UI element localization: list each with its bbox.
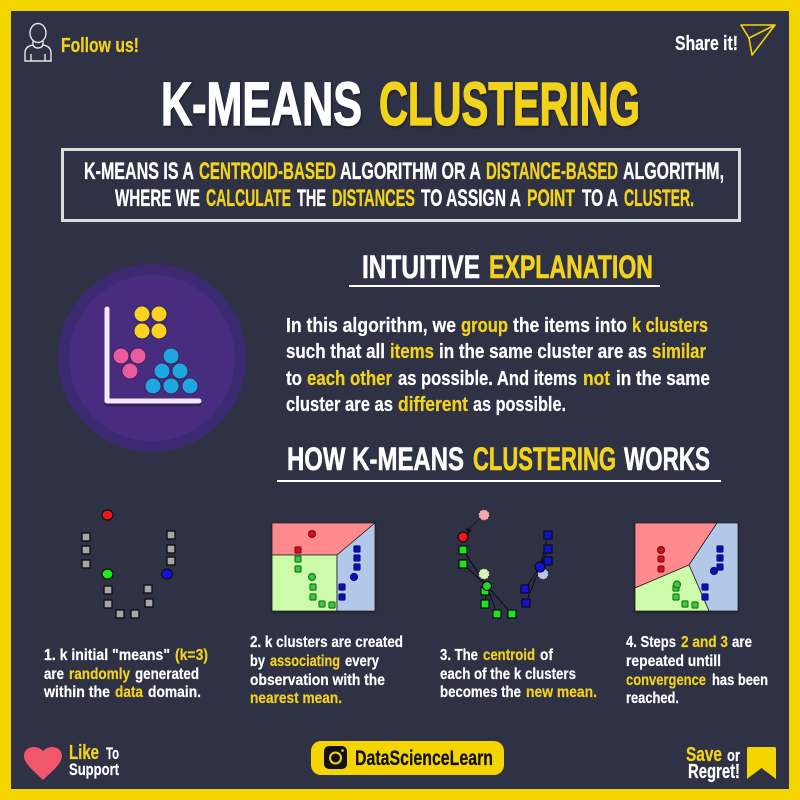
support label: Support xyxy=(69,760,119,779)
like to support xyxy=(24,742,119,780)
step 2 caption xyxy=(250,634,403,707)
definition line 2: POINT xyxy=(527,185,575,212)
definition line 2 xyxy=(115,185,694,212)
step 1 caption xyxy=(43,647,208,701)
step 4 diagram: converged regions xyxy=(635,523,738,611)
step 3 caption xyxy=(440,647,597,701)
icon: heart xyxy=(24,747,62,780)
blue points xyxy=(702,546,723,600)
icon: person xyxy=(25,24,51,61)
explanation paragraph: such that all xyxy=(286,341,385,363)
explanation paragraph: in the same cluster are as xyxy=(439,341,647,363)
step 2 caption: observation with the xyxy=(250,672,385,689)
definition line 1: CENTROID-BASED xyxy=(199,158,336,185)
save or regret xyxy=(686,744,776,783)
new means xyxy=(458,532,545,590)
step 4 caption: reached. xyxy=(626,690,679,707)
yellow cluster xyxy=(134,306,167,339)
regret label: Regret! xyxy=(688,761,740,783)
definition line 2: THE xyxy=(297,185,326,212)
step 1 caption: randomly xyxy=(69,666,130,683)
definition line 2: TO ASSIGN A xyxy=(421,185,521,212)
heading: how k-means clustering works: HOW K-MEANS xyxy=(287,441,464,477)
step 4 caption: repeated untill xyxy=(626,653,721,670)
step 3 caption: centroid xyxy=(483,647,535,664)
explanation paragraph: different xyxy=(398,394,468,416)
blue cluster xyxy=(145,348,198,394)
definition line 2: DISTANCES xyxy=(332,185,415,212)
heading: intuitive explanation: INTUITIVE xyxy=(362,249,480,285)
icon: cluster scatter badge xyxy=(58,264,246,452)
definition line 1: ALGORITHM OR A xyxy=(340,158,481,185)
to label: To xyxy=(106,744,119,763)
green points xyxy=(459,546,516,618)
step 1 caption: generated xyxy=(135,666,199,683)
explanation paragraph: In this algorithm, we xyxy=(286,315,456,337)
red points xyxy=(295,530,316,553)
step 4 caption: convergence xyxy=(626,672,706,689)
green points xyxy=(673,581,698,608)
heading: intuitive explanation: EXPLANATION xyxy=(489,249,653,285)
step 2 diagram: voronoi assignment xyxy=(272,523,375,611)
title: CLUSTERING xyxy=(379,70,640,138)
cluster regions xyxy=(635,523,738,611)
step 2 caption: every xyxy=(345,653,379,670)
step 1 caption: (k=3) xyxy=(175,647,208,664)
step 1 caption: within the xyxy=(43,684,110,701)
step 2 caption: nearest mean. xyxy=(250,690,342,707)
step 4 caption xyxy=(626,634,768,707)
follow us label: Follow us! xyxy=(61,35,139,57)
explanation paragraph: in the same xyxy=(616,368,710,390)
icon: paper plane xyxy=(741,25,775,55)
definition line 2: WHERE WE xyxy=(115,185,200,212)
follow us xyxy=(25,24,139,61)
heading: how k-means clustering works: WORKS xyxy=(624,441,710,477)
explanation paragraph: not xyxy=(583,368,610,390)
heading: intuitive explanation xyxy=(349,249,660,287)
step 4 caption: 2 and 3 xyxy=(681,634,728,651)
step 1 caption: domain. xyxy=(148,684,201,701)
icon: instagram xyxy=(324,746,347,769)
like label: Like xyxy=(69,742,99,764)
step 1 caption: are xyxy=(44,666,64,683)
explanation paragraph: k clusters xyxy=(632,315,708,337)
title: K-MEANS xyxy=(161,70,362,138)
cluster regions xyxy=(272,523,375,611)
explanation paragraph: the items into xyxy=(513,315,627,337)
instagram handle button xyxy=(311,741,504,775)
step 1 diagram: initial means xyxy=(82,510,175,618)
step 2 caption: associating xyxy=(270,653,340,670)
red points xyxy=(658,546,664,572)
explanation paragraph: items xyxy=(390,341,434,363)
icon: bookmark xyxy=(747,747,776,779)
definition line 1: DISTANCE-BASED xyxy=(486,158,618,185)
explanation paragraph: cluster are as xyxy=(286,394,393,416)
definition line 1: ALGORITHM, xyxy=(623,158,724,185)
step 3 caption: 3. The xyxy=(440,647,478,664)
blue points xyxy=(521,531,552,607)
definition line 2: TO A xyxy=(582,185,618,212)
explanation paragraph: as possible. xyxy=(473,394,566,416)
blue points xyxy=(339,546,360,600)
title xyxy=(161,70,640,138)
share it label: Share it! xyxy=(675,33,738,55)
definition line 1 xyxy=(84,158,724,185)
unassigned points xyxy=(82,531,175,618)
movement arrow xyxy=(466,528,472,534)
definition line 2: CLUSTER. xyxy=(624,185,694,212)
definition line 2: CALCULATE xyxy=(206,185,291,212)
step 3 caption: new mean. xyxy=(526,684,597,701)
explanation paragraph: to xyxy=(286,368,302,390)
step 3 caption: of xyxy=(540,647,554,664)
share it xyxy=(675,25,775,55)
definition line 1: K-MEANS IS A xyxy=(84,158,194,185)
random means xyxy=(102,510,172,579)
step 4 caption: 4. Steps xyxy=(626,634,676,651)
step 4 caption: are xyxy=(732,634,752,651)
or label: or xyxy=(727,746,740,765)
step 4 caption: has been xyxy=(712,672,768,689)
chart axes xyxy=(107,309,199,404)
definition box xyxy=(62,150,740,220)
step 3 caption: each of the k clusters xyxy=(440,666,576,683)
green points xyxy=(295,556,335,608)
heading: how k-means clustering works xyxy=(277,441,721,482)
explanation paragraph xyxy=(286,315,710,416)
step 1 caption: data xyxy=(115,684,143,701)
explanation paragraph: as possible. And items xyxy=(398,368,577,390)
handle text: DataScienceLearn xyxy=(355,747,493,770)
save label: Save xyxy=(686,744,722,766)
connecting lines xyxy=(463,515,548,614)
pink cluster xyxy=(113,348,146,379)
step 1 caption: 1. k initial "means" xyxy=(44,647,170,664)
step 2 caption: 2. k clusters are created xyxy=(250,634,403,651)
explanation paragraph: group xyxy=(461,315,508,337)
step 3 caption: becomes the xyxy=(440,684,521,701)
explanation paragraph: similar xyxy=(652,341,706,363)
step 2 caption: by xyxy=(250,653,265,670)
explanation paragraph: each other xyxy=(307,368,392,390)
heading: how k-means clustering works: CLUSTERING xyxy=(473,441,616,477)
step 3 diagram: centroids move xyxy=(458,510,552,618)
previous means xyxy=(479,510,548,579)
